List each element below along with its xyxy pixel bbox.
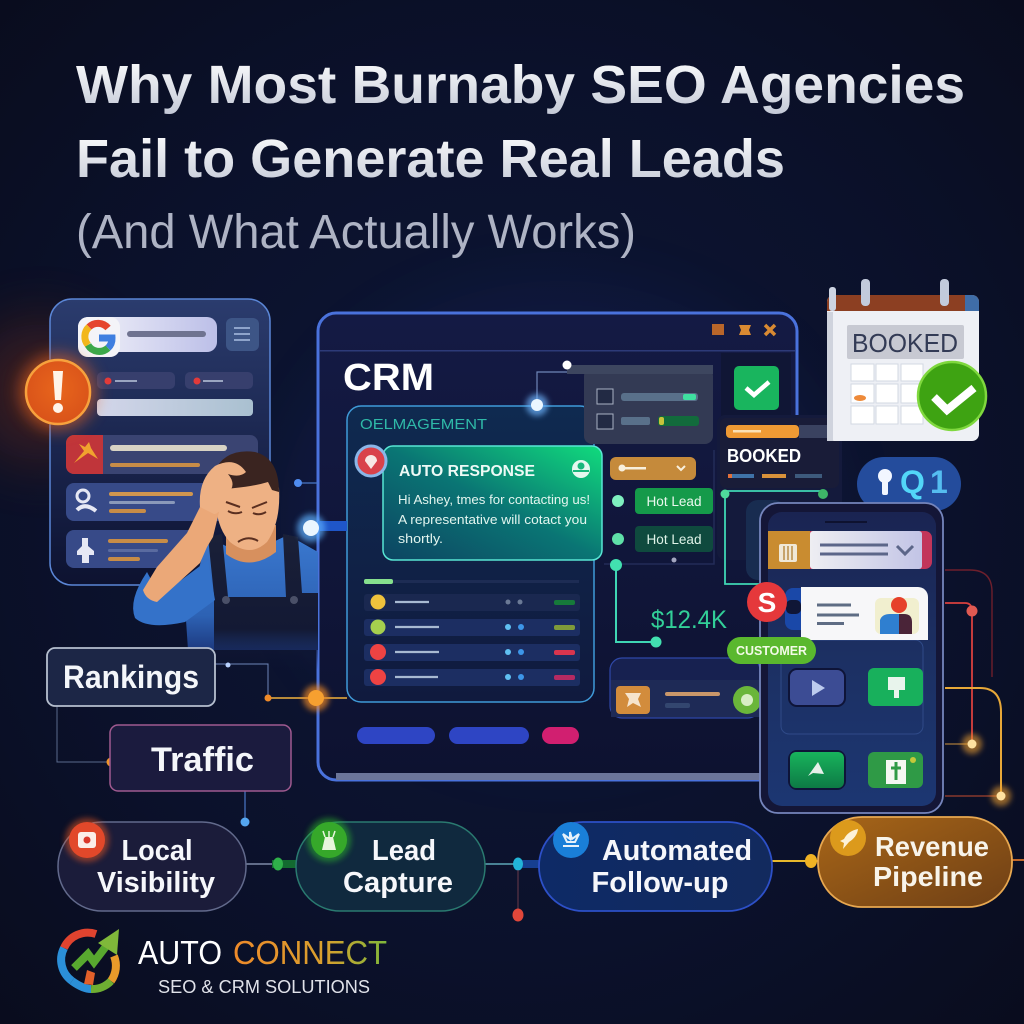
callout: auto response xyxy=(383,446,602,560)
title: Fail to Generate Real Leads xyxy=(76,129,785,189)
search bar xyxy=(78,317,217,357)
panel: search results xyxy=(50,299,270,585)
callout: auto response: Hi Ashey, tmes for contacting us! xyxy=(398,492,590,507)
highlighted result bar xyxy=(97,399,253,416)
face xyxy=(216,466,279,550)
inner panel xyxy=(781,640,923,734)
title xyxy=(76,55,965,189)
logo: wordmark xyxy=(138,934,387,997)
filter pills xyxy=(97,372,253,389)
callout: auto response: AUTO RESPONSE xyxy=(399,463,535,480)
icon: green check xyxy=(721,353,791,421)
result row 1 xyxy=(66,435,258,474)
badge: customer: CUSTOMER xyxy=(736,644,807,658)
panel: hot leads xyxy=(604,450,714,564)
step: local visibility: Local xyxy=(122,835,192,867)
badge: Q1: Q xyxy=(900,464,925,500)
callout: auto response: A representative will cotact you xyxy=(398,512,587,527)
icon: alert xyxy=(20,354,96,430)
step: revenue pipeline xyxy=(818,817,1012,907)
callout: auto response: shortly. xyxy=(398,531,443,546)
step: automated follow-up xyxy=(539,822,772,911)
badge: Q1 xyxy=(857,457,961,511)
step: local visibility xyxy=(58,818,246,911)
step: lead capture: Lead xyxy=(372,835,436,867)
panel: CRM window xyxy=(47,279,1024,997)
phone banner xyxy=(768,531,932,569)
icon: S badge: S xyxy=(758,587,776,618)
step: revenue pipeline: Pipeline xyxy=(873,861,983,892)
step: automated follow-up: Follow-up xyxy=(592,867,728,899)
panel: management: OELMAGEMENT xyxy=(360,416,487,433)
logo: wordmark: SEO & CRM SOLUTIONS xyxy=(158,977,370,997)
hair xyxy=(214,451,279,492)
panel: pipeline card xyxy=(610,658,761,718)
panel: status widget xyxy=(567,365,713,444)
subtitle: (And What Actually Works) xyxy=(76,206,636,259)
revenue figure: $12.4K xyxy=(651,606,727,634)
step: lead capture: Capture xyxy=(343,867,453,899)
step: local visibility: Visibility xyxy=(97,867,215,899)
arm xyxy=(143,505,219,602)
hand xyxy=(200,462,246,514)
neck xyxy=(226,525,276,563)
icon: menu xyxy=(226,318,259,351)
wires: right side xyxy=(945,570,1011,806)
window controls xyxy=(712,324,775,335)
result row 3 xyxy=(66,530,196,568)
connector: CRM node xyxy=(526,360,572,416)
result row 2 xyxy=(66,483,241,521)
badge: customer xyxy=(727,637,816,664)
app buttons xyxy=(788,668,923,790)
heading: CRM: CRM xyxy=(343,357,434,399)
brows and eyes xyxy=(226,502,267,542)
panel: management xyxy=(347,406,594,702)
connector: revenue wire xyxy=(610,559,662,648)
logo: auto connect mark xyxy=(61,929,119,989)
action buttons xyxy=(357,727,579,744)
step: automated follow-up: Automated xyxy=(602,835,752,867)
torso xyxy=(186,535,318,650)
badge: Q1: 1 xyxy=(930,464,948,500)
phone xyxy=(760,503,943,813)
icon: location pin xyxy=(356,446,386,476)
logo: wordmark: AUTO xyxy=(138,934,222,971)
label: Rankings xyxy=(47,648,215,706)
connector: rankings and traffic wires xyxy=(57,662,347,826)
label: Traffic xyxy=(110,725,291,791)
panel: booked card: BOOKED xyxy=(727,446,801,466)
sleeve xyxy=(133,560,215,625)
connectors: pipeline xyxy=(246,854,1024,922)
overalls xyxy=(208,534,318,670)
connector: left node xyxy=(294,479,347,542)
step: revenue pipeline: Revenue xyxy=(875,831,989,862)
man: frustrated person xyxy=(133,451,318,670)
customer card xyxy=(785,587,928,640)
label: Rankings: Rankings xyxy=(63,659,199,695)
step: lead capture xyxy=(296,818,485,911)
lead table xyxy=(364,579,580,686)
panel: hot leads: Hot Lead xyxy=(646,494,702,509)
icon: google G xyxy=(85,323,112,351)
icon: calendar check xyxy=(918,362,986,430)
icon: S badge xyxy=(747,582,787,622)
panel: booked card xyxy=(717,415,842,584)
logo: wordmark: CONNECT xyxy=(233,934,387,971)
panel: hot leads: Hot Lead xyxy=(646,532,702,547)
label: Traffic: Traffic xyxy=(151,741,254,779)
calendar: booked xyxy=(827,279,979,441)
title: Why Most Burnaby SEO Agencies xyxy=(76,55,965,115)
calendar: booked: BOOKED xyxy=(852,328,958,358)
